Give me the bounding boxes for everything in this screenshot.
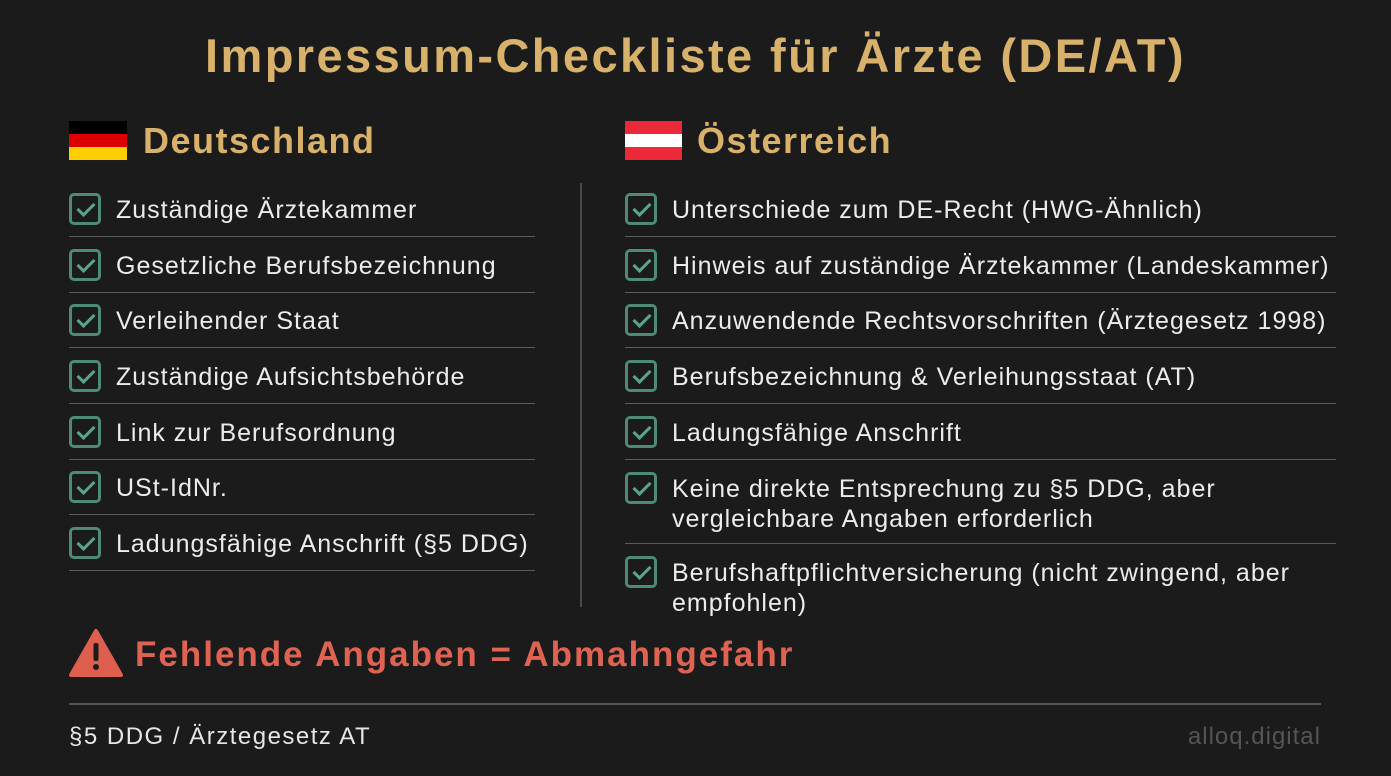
item: vergleichbare Angaben erforderlich — [672, 505, 1094, 533]
item — [625, 195, 1336, 237]
item: Berufsbezeichnung & Verleihungsstaat (AT) — [672, 363, 1196, 391]
footer brand: alloq.digital — [1188, 723, 1321, 750]
item: Berufshaftpflichtversicherung (nicht zwingend, aber — [672, 559, 1290, 587]
item — [625, 418, 1336, 460]
item — [69, 529, 535, 571]
item — [69, 473, 535, 515]
item — [69, 418, 535, 460]
item: Gesetzliche Berufsbezeichnung — [116, 252, 497, 280]
item — [625, 474, 1336, 544]
item — [69, 251, 535, 293]
item: Link zur Berufsordnung — [116, 419, 396, 447]
item: Verleihender Staat — [116, 307, 340, 335]
item — [69, 362, 535, 404]
warning text: Fehlende Angaben = Abmahngefahr — [135, 635, 794, 674]
item: Unterschiede zum DE-Recht (HWG-Ähnlich) — [672, 196, 1203, 224]
item: Anzuwendende Rechtsvorschriften (Ärztegesetz 1998) — [672, 307, 1326, 335]
title: Impressum-Checkliste für Ärzte (DE/AT) — [205, 29, 1186, 82]
heading: Österreich: Österreich — [697, 120, 892, 161]
flag: austria — [625, 121, 682, 160]
item: Zuständige Aufsichtsbehörde — [116, 363, 465, 391]
item — [69, 195, 535, 237]
warning callout — [69, 628, 794, 677]
panel: germany list — [69, 193, 535, 571]
panel: austria list — [625, 193, 1336, 617]
footer source: §5 DDG / Ärztegesetz AT — [69, 723, 371, 750]
item: Ladungsfähige Anschrift — [672, 419, 962, 447]
item: Zuständige Ärztekammer — [116, 196, 417, 224]
item: empfohlen) — [672, 589, 807, 617]
item — [625, 306, 1336, 348]
item: Hinweis auf zuständige Ärztekammer (Landeskammer) — [672, 252, 1330, 280]
item — [625, 362, 1336, 404]
flag: germany — [69, 121, 127, 160]
heading: Deutschland: Deutschland — [143, 120, 376, 161]
item: Keine direkte Entsprechung zu §5 DDG, aber — [672, 475, 1216, 503]
item — [625, 251, 1336, 293]
item — [625, 556, 1290, 617]
icon: warning triangle — [69, 628, 123, 677]
item: Ladungsfähige Anschrift (§5 DDG) — [116, 530, 529, 558]
item: USt-IdNr. — [116, 474, 228, 502]
item — [69, 306, 535, 348]
